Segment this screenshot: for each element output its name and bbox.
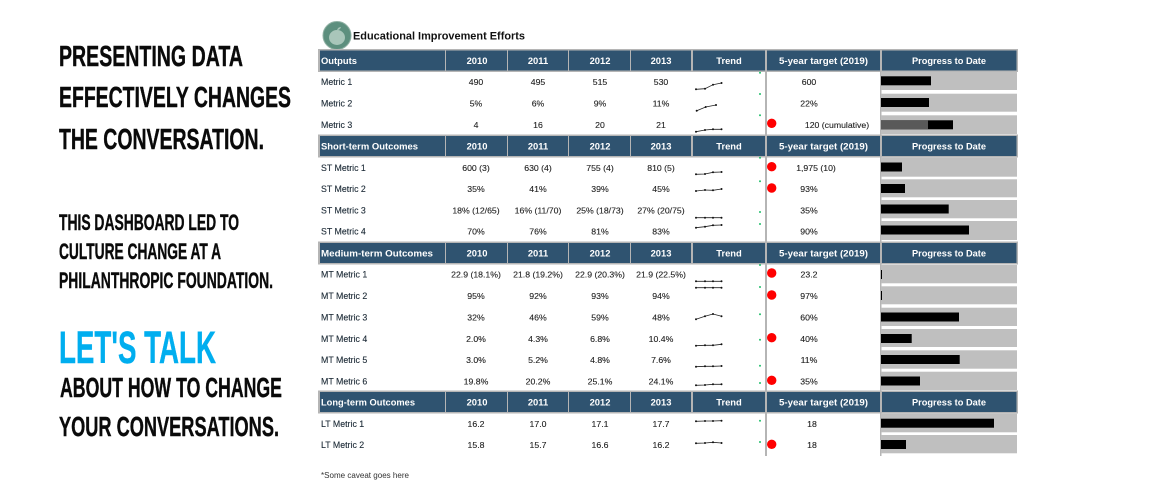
row: mt metric 2: 93% — [591, 291, 609, 301]
row: st metric 1 — [321, 157, 1017, 177]
row: metric 2: 6% — [532, 98, 545, 108]
row: st metric 1: 755 (4) — [586, 163, 614, 173]
text block: culture change — [59, 210, 273, 293]
row: mt metric 6 — [321, 372, 1017, 390]
row: mt metric 1: 23.2 — [801, 270, 818, 280]
row: metric 3 — [321, 114, 1017, 134]
row: mt metric 2 — [321, 286, 1017, 304]
row: mt metric 1: 21.8 (19.2%) — [513, 270, 563, 280]
row: lt metric 2: 16.2 — [653, 440, 670, 450]
header row: short-term outcomes: 5-year target (2019) — [779, 140, 868, 152]
row: metric 1: Metric 1 — [321, 77, 352, 87]
row: st metric 3 — [321, 200, 1017, 218]
row: st metric 2 — [321, 179, 1017, 197]
row: metric 1: 530 — [654, 77, 668, 87]
row: mt metric 1: 22.9 (20.3%) — [575, 270, 625, 280]
row: mt metric 3: 60% — [800, 312, 818, 322]
row: lt metric 1: 17.7 — [653, 419, 670, 429]
row: lt metric 1: 17.1 — [592, 419, 609, 429]
row: metric 1 — [321, 72, 1017, 90]
text block: culture change: PHILANTHROPIC FOUNDATION. — [59, 268, 273, 293]
footnote: caveat: *Some caveat goes here — [321, 471, 409, 480]
row: mt metric 4: 2.0% — [466, 334, 486, 344]
row: lt metric 1: 17.0 — [530, 419, 547, 429]
row: st metric 4: 70% — [467, 226, 485, 236]
row: mt metric 4: MT Metric 4 — [321, 334, 367, 344]
header row: short-term outcomes: 2013 — [651, 140, 671, 152]
row: mt metric 4: 6.8% — [590, 334, 610, 344]
row: lt metric 2: LT Metric 2 — [321, 440, 364, 450]
row: st metric 2: ST Metric 2 — [321, 184, 366, 194]
row: mt metric 5 — [321, 350, 1017, 369]
row: mt metric 4 — [321, 329, 1017, 347]
row: mt metric 5: MT Metric 5 — [321, 355, 367, 365]
row: mt metric 3: 32% — [467, 312, 485, 322]
row: mt metric 6: 20.2% — [526, 376, 551, 386]
row: metric 1: 515 — [593, 77, 607, 87]
row: st metric 2: 39% — [591, 184, 609, 194]
row: st metric 3: 35% — [800, 206, 818, 216]
row: lt metric 1: 18 — [807, 419, 817, 429]
header row: medium-term outcomes: 5-year target (2019) — [779, 248, 868, 258]
header row: medium-term outcomes: Progress to Date — [912, 248, 986, 258]
text block: change your conversations: YOUR CONVERSATIONS. — [59, 411, 279, 442]
header row: medium-term outcomes: 2012 — [590, 248, 610, 258]
row: mt metric 5: 7.6% — [651, 355, 671, 365]
panel: short-term outcomes — [318, 134, 1018, 240]
row: mt metric 1: 22.9 (18.1%) — [451, 270, 501, 280]
header row: short-term outcomes — [318, 134, 1018, 158]
row: mt metric 5: 5.2% — [528, 355, 548, 365]
header row: long-term outcomes: 5-year target (2019) — [779, 396, 868, 408]
text block: culture change: THIS DASHBOARD LED TO — [59, 210, 239, 235]
row: metric 3: 120 (cumulative) — [805, 120, 869, 130]
row: mt metric 5: 4.8% — [590, 355, 610, 365]
header row: outputs: Progress to Date — [912, 55, 986, 66]
row: mt metric 2: 92% — [529, 291, 547, 301]
header row: outputs: 2011 — [528, 55, 548, 66]
row: st metric 3: 18% (12/65) — [452, 206, 500, 216]
row: st metric 4: 90% — [800, 226, 818, 236]
header row: medium-term outcomes: 2011 — [528, 248, 548, 258]
panel: long-term outcomes — [318, 390, 1018, 453]
heading: presenting data: THE CONVERSATION. — [59, 124, 264, 156]
header row: long-term outcomes: 2011 — [528, 396, 548, 408]
header row: medium-term outcomes: Medium-term Outcomes — [321, 248, 433, 258]
row: mt metric 5: 3.0% — [466, 355, 486, 365]
row: mt metric 6: 35% — [800, 376, 818, 386]
panel: outputs — [318, 49, 1018, 134]
icon: apple logo — [323, 22, 351, 50]
row: metric 3: 16 — [533, 120, 543, 130]
header row: medium-term outcomes: 2010 — [467, 248, 487, 258]
heading: presenting data: EFFECTIVELY CHANGES — [59, 82, 291, 114]
left message panel — [59, 41, 291, 442]
panel: medium-term outcomes — [318, 242, 1018, 390]
header row: outputs: Outputs — [321, 55, 357, 66]
header row: long-term outcomes: Trend — [716, 396, 742, 408]
text block: change your conversations: ABOUT HOW TO CHANGE — [60, 372, 282, 403]
header row: outputs: 2010 — [467, 55, 487, 66]
row: metric 1: 495 — [531, 77, 545, 87]
row: metric 2: Metric 2 — [321, 98, 352, 108]
header row: outputs — [318, 49, 1018, 72]
header row: medium-term outcomes — [318, 242, 1018, 264]
row: mt metric 3: MT Metric 3 — [321, 312, 367, 322]
row: mt metric 4: 4.3% — [528, 334, 548, 344]
row: metric 3: Metric 3 — [321, 120, 352, 130]
row: metric 3: 20 — [595, 120, 605, 130]
header row: medium-term outcomes: Trend — [716, 248, 742, 258]
row: st metric 2: 35% — [467, 184, 485, 194]
header row: long-term outcomes: Long-term Outcomes — [321, 396, 415, 408]
header row: short-term outcomes: 2010 — [467, 140, 487, 152]
row: mt metric 2: 95% — [467, 291, 485, 301]
row: lt metric 2 — [321, 435, 1017, 453]
row: st metric 3: ST Metric 3 — [321, 206, 366, 216]
header row: outputs: 5-year target (2019) — [779, 55, 868, 66]
row: mt metric 6: 25.1% — [588, 376, 613, 386]
row: mt metric 2: 97% — [800, 291, 818, 301]
row: mt metric 2: MT Metric 2 — [321, 291, 367, 301]
text block: change your conversations — [59, 372, 282, 442]
header row: medium-term outcomes: 2013 — [651, 248, 671, 258]
row: st metric 1: 600 (3) — [462, 163, 490, 173]
row: mt metric 1: MT Metric 1 — [321, 270, 367, 280]
row: metric 2: 11% — [653, 98, 670, 108]
row: metric 1: 490 — [469, 77, 483, 87]
row: st metric 2: 93% — [800, 184, 818, 194]
row: mt metric 3: 46% — [529, 312, 547, 322]
header row: short-term outcomes: Progress to Date — [912, 140, 986, 152]
header row: outputs: 2012 — [590, 55, 610, 66]
header row: long-term outcomes: 2013 — [651, 396, 671, 408]
row: metric 3: 21 — [656, 120, 666, 130]
row: st metric 4 — [321, 221, 1017, 240]
row: mt metric 6: 19.8% — [464, 376, 489, 386]
row: lt metric 1: LT Metric 1 — [321, 419, 364, 429]
row: st metric 2: 45% — [652, 184, 670, 194]
row: st metric 3: 25% (18/73) — [576, 206, 624, 216]
row: metric 3: 4 — [474, 120, 479, 130]
header row: short-term outcomes: Short-term Outcomes — [321, 140, 418, 152]
header row: outputs: 2013 — [651, 55, 671, 66]
row: st metric 2: 41% — [529, 184, 547, 194]
row: metric 2: 5% — [470, 98, 483, 108]
row: st metric 1: 630 (4) — [524, 163, 552, 173]
row: metric 2 — [321, 93, 1017, 112]
header row: short-term outcomes: Trend — [716, 140, 742, 152]
row: st metric 4: 83% — [652, 226, 670, 236]
row: mt metric 3: 59% — [591, 312, 609, 322]
row: lt metric 2: 18 — [807, 440, 817, 450]
row: mt metric 1 — [321, 264, 1017, 283]
header row: long-term outcomes: 2012 — [590, 396, 610, 408]
row: mt metric 1: 21.9 (22.5%) — [636, 270, 686, 280]
row: mt metric 6: 24.1% — [649, 376, 674, 386]
row: lt metric 2: 15.7 — [530, 440, 547, 450]
header row: short-term outcomes: 2011 — [528, 140, 548, 152]
call to action: let's talk: LET'S TALK — [59, 322, 216, 373]
header row: long-term outcomes — [318, 390, 1018, 414]
row: mt metric 4: 10.4% — [649, 334, 674, 344]
header row: short-term outcomes: 2012 — [590, 140, 610, 152]
row: metric 2: 22% — [800, 98, 818, 108]
row: st metric 3: 27% (20/75) — [637, 206, 685, 216]
row: lt metric 1 — [321, 414, 1017, 432]
dashboard title: Educational Improvement Efforts — [353, 30, 525, 42]
row: mt metric 5: 11% — [801, 355, 818, 365]
heading: presenting data: PRESENTING DATA — [59, 41, 243, 73]
column dividers — [765, 50, 882, 456]
row: mt metric 3: 48% — [652, 312, 670, 322]
row: mt metric 2: 94% — [652, 291, 670, 301]
row: lt metric 2: 16.6 — [592, 440, 609, 450]
row: st metric 3: 16% (11/70) — [515, 206, 561, 216]
heading: presenting data — [59, 41, 291, 156]
row: st metric 1: 1,975 (10) — [796, 163, 836, 173]
row: metric 2: 9% — [594, 98, 607, 108]
row: lt metric 2: 15.8 — [468, 440, 485, 450]
row: mt metric 3 — [321, 308, 1017, 326]
row: st metric 1: ST Metric 1 — [321, 163, 366, 173]
row: metric 1: 600 — [802, 77, 816, 87]
row: mt metric 6: MT Metric 6 — [321, 376, 367, 386]
row: st metric 4: 76% — [529, 226, 547, 236]
row: st metric 4: ST Metric 4 — [321, 226, 366, 236]
row: st metric 1: 810 (5) — [647, 163, 675, 173]
header row: outputs: Trend — [716, 55, 742, 66]
text block: culture change: CULTURE CHANGE AT A — [59, 239, 221, 264]
header row: long-term outcomes: Progress to Date — [912, 396, 986, 408]
header row: long-term outcomes: 2010 — [467, 396, 487, 408]
row: st metric 4: 81% — [591, 226, 609, 236]
row: mt metric 4: 40% — [800, 334, 818, 344]
row: lt metric 1: 16.2 — [468, 419, 485, 429]
